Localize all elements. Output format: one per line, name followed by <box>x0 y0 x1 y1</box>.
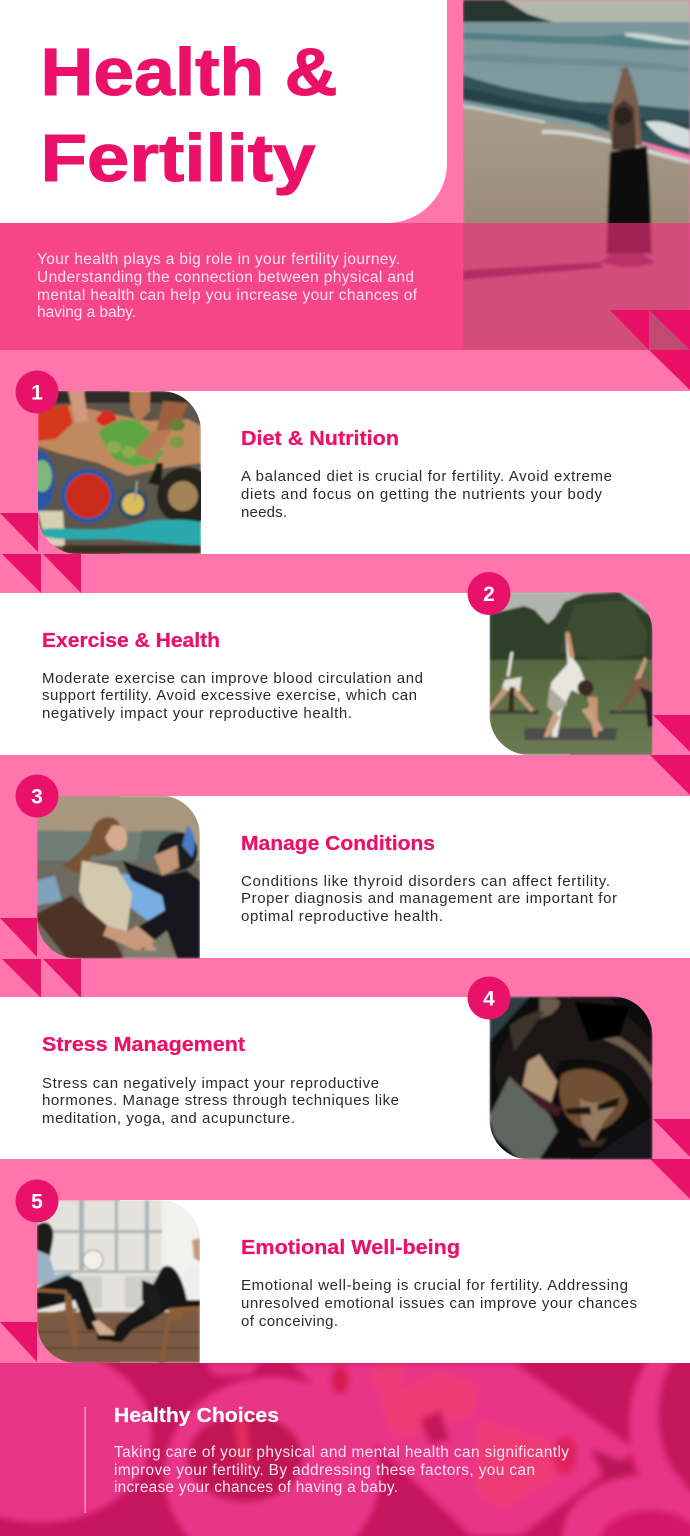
panel: step 1 diet and nutrition <box>0 370 690 593</box>
heading: Exercise & Health <box>42 629 220 652</box>
figure <box>608 67 642 148</box>
icon: triangles <box>650 1119 690 1199</box>
body text: support fertility. Avoid excessive exercise, which can <box>42 687 417 704</box>
icon: triangles <box>650 715 690 795</box>
woman <box>62 817 122 876</box>
icon: top right triangles <box>610 310 690 390</box>
badge 3 <box>16 774 58 818</box>
right person <box>182 1265 200 1305</box>
body text: Moderate exercise can improve blood circulation and <box>42 670 423 687</box>
body text <box>241 1277 637 1330</box>
icon: triangles <box>0 513 81 593</box>
intro text: having a baby. <box>37 304 136 321</box>
icon: triangles <box>0 918 81 998</box>
body text <box>241 468 612 521</box>
man <box>157 832 198 871</box>
body text: negatively impact your reproductive health. <box>42 705 352 722</box>
body text: meditation, yoga, and acupuncture. <box>42 1110 295 1127</box>
people <box>548 632 590 737</box>
photo: stressed woman <box>490 996 652 1160</box>
badge 2: 2 <box>483 583 495 606</box>
footer text: improve your fertility. By addressing these factors, you can <box>114 1462 535 1479</box>
badge 1: 1 <box>31 382 43 404</box>
title: Fertility <box>40 121 316 196</box>
panel: step 3 manage conditions <box>0 774 690 998</box>
photo: outdoor yoga <box>490 592 652 755</box>
footer text <box>114 1444 569 1496</box>
panel: step 5 emotional well-being <box>0 1180 690 1365</box>
badge 1 <box>16 370 58 414</box>
footer text: increase your chances of having a baby. <box>114 1479 398 1496</box>
divider line <box>84 1407 86 1513</box>
heading: Stress Management <box>42 1033 245 1056</box>
body text: needs. <box>241 504 287 521</box>
panel: intro band <box>0 223 463 350</box>
body text: optimal reproductive health. <box>241 908 443 925</box>
heading: Diet & Nutrition <box>241 427 399 450</box>
body text: of conceiving. <box>241 1313 338 1330</box>
body text: diets and focus on getting the nutrients your body <box>241 486 602 503</box>
badge 2 <box>468 572 510 615</box>
photo: couple talking <box>37 796 200 958</box>
intro text: Your health plays a big role in your fertility journey. <box>37 251 400 268</box>
body text <box>241 873 617 925</box>
body text: hormones. Manage stress through techniques like <box>42 1092 399 1109</box>
badge 4: 4 <box>483 988 495 1010</box>
body text: Emotional well-being is crucial for fertility. Addressing <box>241 1277 628 1294</box>
panel: healthy choices footer <box>0 1363 690 1536</box>
badge 5 <box>16 1180 58 1222</box>
badge 3: 3 <box>31 786 43 808</box>
left person <box>37 1222 53 1260</box>
intro text <box>37 251 418 321</box>
heading: Emotional Well-being <box>241 1236 460 1259</box>
panel: title card <box>0 0 447 223</box>
body text: Stress can negatively impact your reproductive <box>42 1075 379 1092</box>
badge 4 <box>468 976 510 1020</box>
photo: therapy session <box>37 1200 200 1365</box>
body text: Conditions like thyroid disorders can affect fertility. <box>241 873 610 890</box>
intro text: mental health can help you increase your chances of <box>37 287 418 304</box>
badge 5: 5 <box>31 1190 43 1214</box>
footer text: Taking care of your physical and mental health can significantly <box>114 1444 569 1461</box>
body text <box>42 670 423 722</box>
icon: triangle <box>0 1322 37 1362</box>
photo: woman on beach <box>463 0 690 350</box>
footer background photo <box>0 1363 690 1536</box>
body text <box>42 1075 399 1127</box>
title <box>40 35 338 196</box>
title: Health & <box>40 35 338 110</box>
panel: step 2 exercise and health <box>0 572 690 795</box>
body text: unresolved emotional issues can improve your chances <box>241 1295 637 1312</box>
intro text: Understanding the connection between physical and <box>37 269 414 286</box>
footer heading: Healthy Choices <box>114 1404 279 1427</box>
photo: food preparation <box>38 391 201 554</box>
heading: Manage Conditions <box>241 832 435 855</box>
body text: Proper diagnosis and management are important for <box>241 890 617 907</box>
body text: A balanced diet is crucial for fertility. Avoid extreme <box>241 468 612 485</box>
panel: step 4 stress management <box>0 976 690 1199</box>
